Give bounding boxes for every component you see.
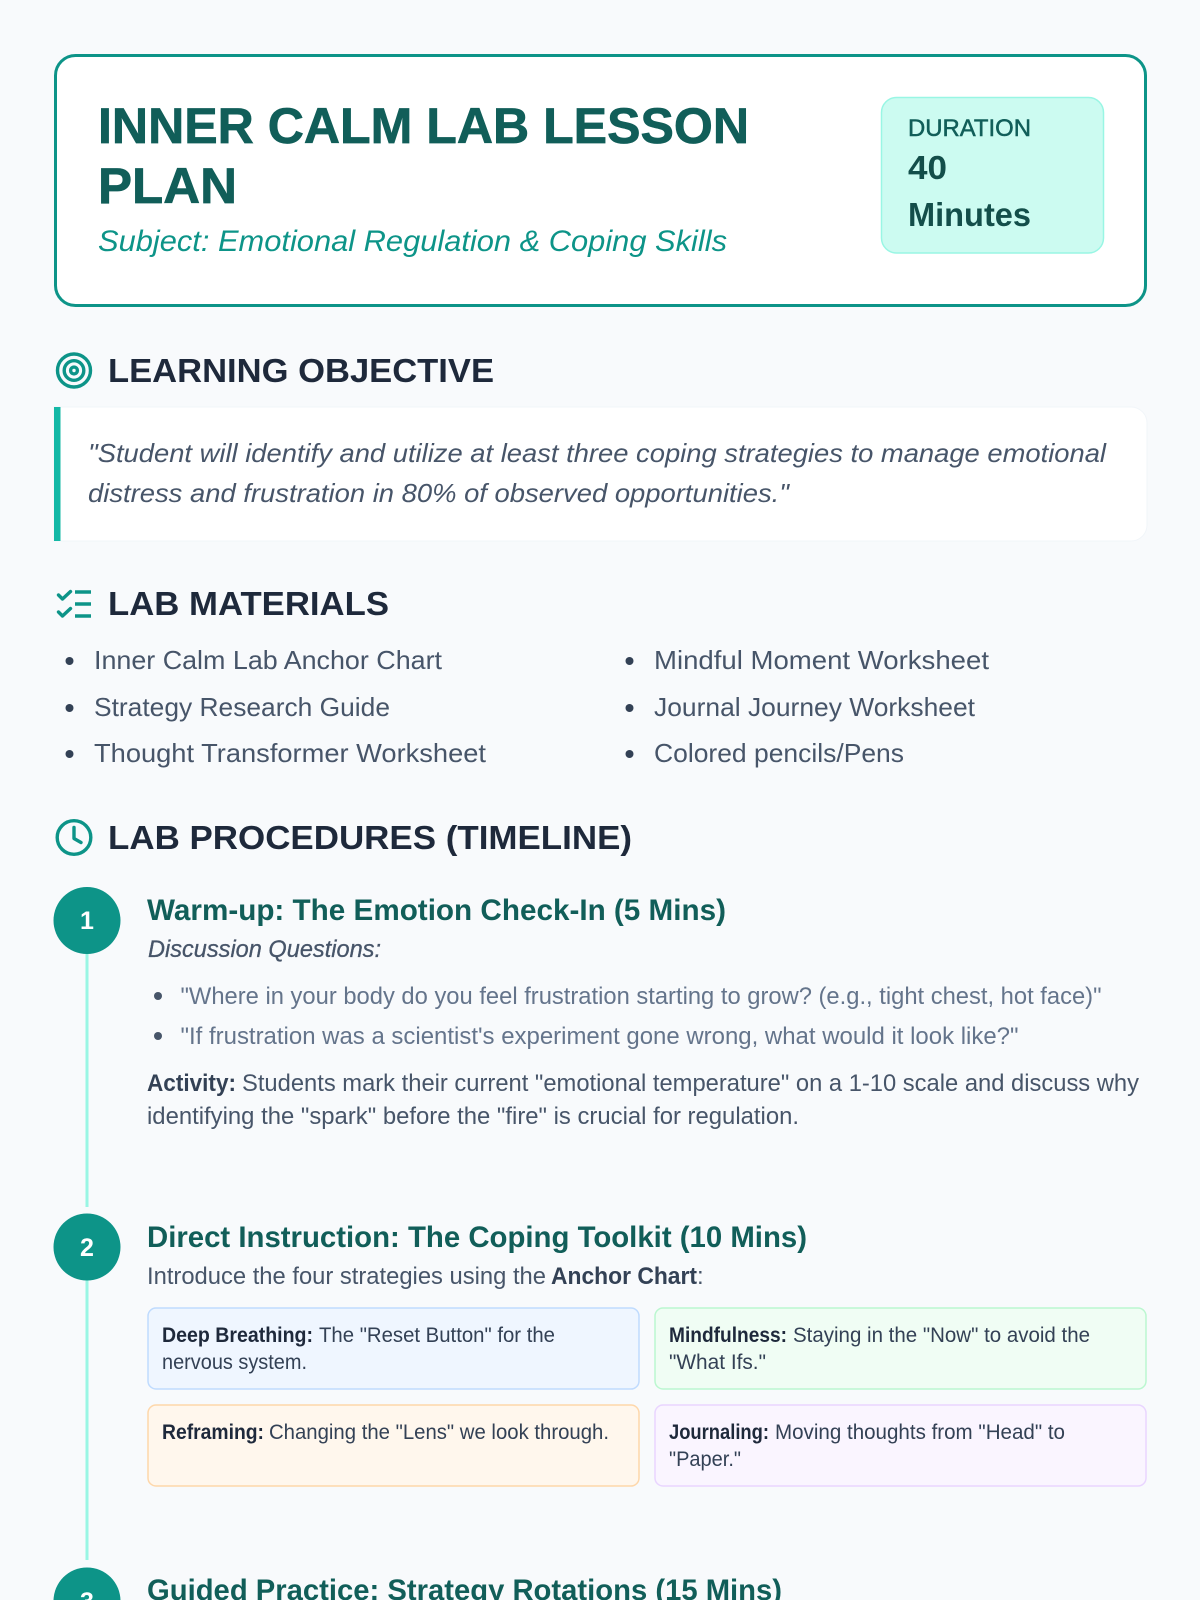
icon: checklist (58, 592, 91, 616)
step number 3 (54, 1568, 120, 1600)
card: mindfulness: "What Ifs." (669, 1351, 766, 1374)
step 2 intro: Introduce the four strategies using the (147, 1263, 546, 1290)
activity description: Activity: (147, 1070, 236, 1097)
heading: learning objective: LEARNING OBJECTIVE (108, 352, 494, 389)
card: mindfulness: Staying in the "Now" to avoid the (793, 1324, 1090, 1347)
title: PLAN (98, 158, 237, 214)
icon: clock (57, 821, 91, 854)
activity description: identifying the "spark" before the "fire" is crucial for regulation. (147, 1103, 799, 1130)
card: mindfulness (655, 1308, 1146, 1389)
card: journaling: Moving thoughts from "Head" to (775, 1421, 1065, 1444)
subject subtitle: Subject: Emotional Regulation & Coping Skills (98, 225, 727, 258)
list: lab materials: Thought Transformer Worksheet (94, 738, 487, 768)
card: deep breathing (148, 1308, 639, 1389)
card: reframing: Changing the "Lens" we look through. (269, 1421, 609, 1444)
card: deep breathing: nervous system. (162, 1351, 307, 1374)
heading: lab procedures: LAB PROCEDURES (TIMELINE) (108, 819, 632, 856)
card: deep breathing: Deep Breathing: (162, 1324, 313, 1347)
step 1 title: Warm-up: The Emotion Check-In (5 Mins) (147, 894, 726, 927)
activity description: Students mark their current "emotional temperature" on a 1-10 scale and discuss why (242, 1070, 1139, 1097)
step number 1: 1 (80, 907, 94, 935)
card: mindfulness: Mindfulness: (669, 1324, 787, 1347)
duration badge: DURATION (908, 115, 1031, 142)
card: journaling (655, 1405, 1146, 1486)
step 2 intro: : (697, 1263, 704, 1290)
step 1 (54, 887, 1139, 1130)
title (98, 98, 749, 214)
duration badge: Minutes (908, 196, 1031, 233)
list: lab materials: Inner Calm Lab Anchor Chart (94, 645, 443, 675)
activity description (147, 1070, 1139, 1130)
step 2 intro: Anchor Chart (551, 1263, 697, 1290)
list: lab materials (66, 645, 990, 768)
list: lab materials: Colored pencils/Pens (654, 738, 904, 768)
panel: learning objective quote: distress and frustration in 80% of observed opportunities." (88, 478, 791, 508)
step 2 (54, 1214, 1146, 1486)
card: reframing: Reframing: (162, 1421, 264, 1444)
duration badge: 40 (908, 149, 947, 186)
title: INNER CALM LAB LESSON (98, 98, 749, 154)
card: journaling: Journaling: (669, 1421, 769, 1444)
card: deep breathing: The "Reset Button" for the (319, 1324, 555, 1347)
discussion questions list: "Where in your body do you feel frustration starting to grow? (e.g., tight chest, hot face)" (180, 983, 1102, 1010)
panel: learning objective quote (54, 407, 1147, 541)
step number 2: 2 (80, 1234, 94, 1262)
timeline connector lines (86, 953, 88, 1560)
discussion questions label: Discussion Questions: (148, 936, 381, 963)
step 2 title: Direct Instruction: The Coping Toolkit (10 Mins) (147, 1221, 807, 1254)
card: reframing (148, 1405, 639, 1486)
step number 1 (54, 887, 120, 954)
heading: lab materials: LAB MATERIALS (108, 585, 389, 622)
icon: target (58, 354, 90, 387)
duration badge (882, 98, 1104, 253)
step 3 (54, 1568, 782, 1600)
step number 2 (54, 1214, 120, 1280)
card: journaling: "Paper." (669, 1448, 741, 1471)
discussion questions list: "If frustration was a scientist's experiment gone wrong, what would it look like?" (180, 1023, 1018, 1050)
panel: lesson header (56, 56, 1146, 306)
list: lab materials: Mindful Moment Worksheet (654, 645, 990, 675)
discussion questions list (154, 983, 1102, 1050)
list: lab materials: Journal Journey Worksheet (654, 692, 976, 722)
panel: learning objective quote: "Student will identify and utilize at least three coping strategies to manage emotional (88, 438, 1107, 468)
list: lab materials: Strategy Research Guide (94, 692, 390, 722)
